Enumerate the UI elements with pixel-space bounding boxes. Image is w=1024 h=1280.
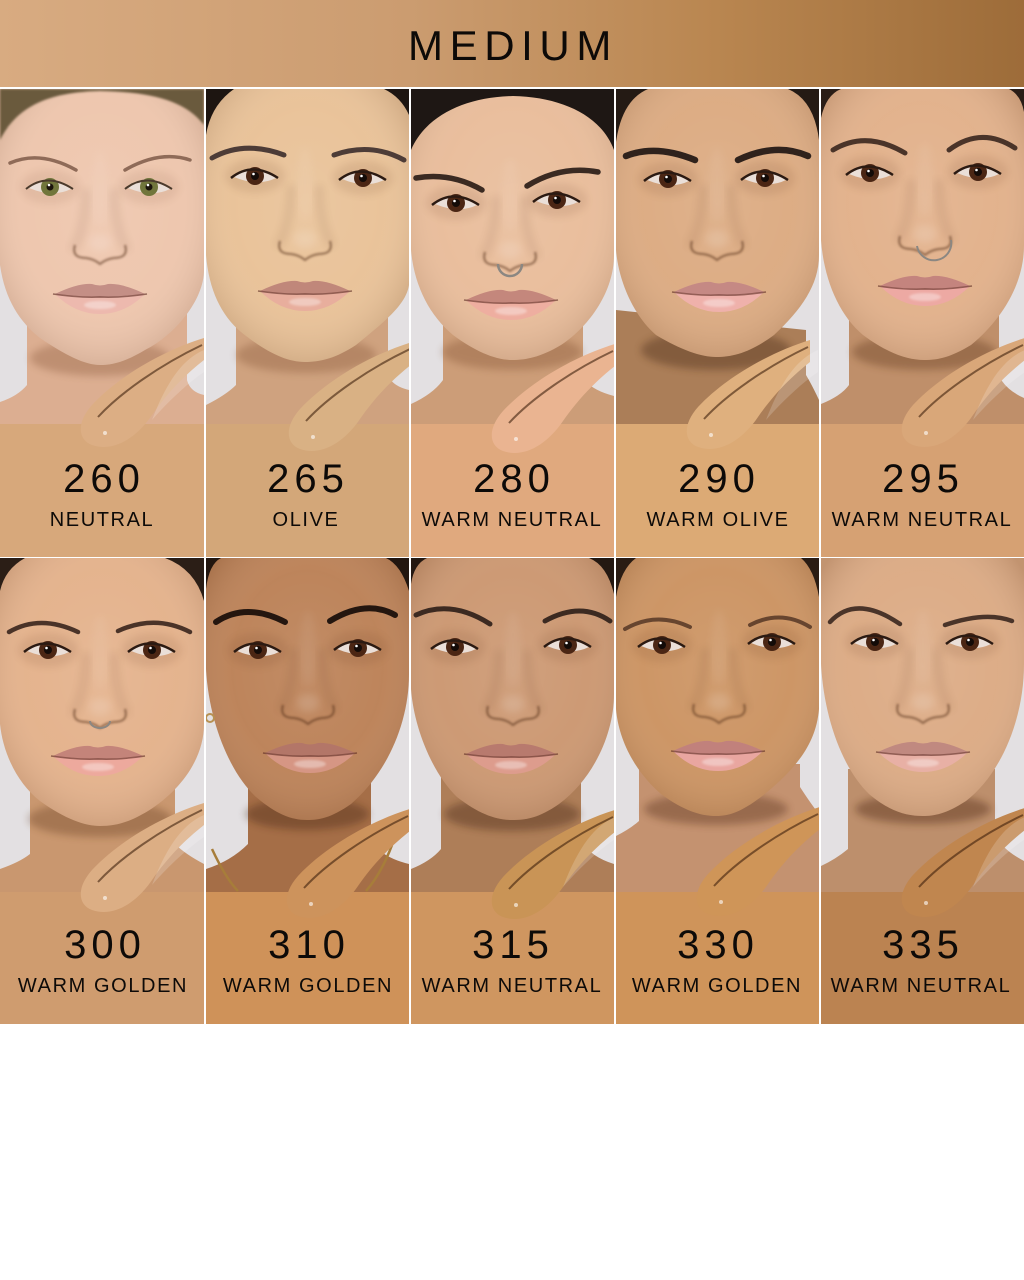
shade number 290: 290 <box>678 457 760 501</box>
portrait 315 <box>411 558 614 893</box>
shade name 310: WARM GOLDEN <box>223 975 393 997</box>
portrait 290 <box>616 89 819 424</box>
foundation smear 280 <box>492 344 615 453</box>
portrait 310 <box>206 558 409 893</box>
foundation smear 260 <box>81 338 204 447</box>
portrait 280 <box>411 89 614 424</box>
panel: shade 315 <box>411 558 614 1024</box>
panel: shade 260 <box>0 89 204 557</box>
foundation smear 300 <box>81 803 204 912</box>
shade name 265: OLIVE <box>273 509 339 531</box>
nose ring <box>90 721 110 728</box>
portrait 300 <box>0 558 204 893</box>
panel: shade 280 <box>411 89 614 557</box>
portrait 260 <box>0 89 204 424</box>
shade name 280: WARM NEUTRAL <box>422 509 602 531</box>
panel: shade 300 <box>0 558 204 1024</box>
foundation smear 310 <box>287 809 410 918</box>
portrait 295 <box>821 89 1024 424</box>
shade number 260: 260 <box>63 457 145 501</box>
portrait 330 <box>616 558 819 893</box>
shade number 310: 310 <box>268 923 350 967</box>
portrait 265 <box>206 89 409 424</box>
nose ring <box>498 264 522 276</box>
shade number 295: 295 <box>882 457 964 501</box>
panel: shade 295 <box>821 89 1024 557</box>
foundation smear 335 <box>902 808 1024 917</box>
panel: shade 330 <box>616 558 819 1024</box>
panel: shade 265 <box>206 89 409 557</box>
shade number 265: 265 <box>267 457 349 501</box>
shade name 260: NEUTRAL <box>50 509 154 531</box>
header banner <box>0 0 1024 87</box>
nose ring <box>917 240 951 260</box>
earring <box>206 714 214 722</box>
shade name 290: WARM OLIVE <box>646 509 790 531</box>
foundation smear 265 <box>289 342 412 451</box>
shade number 335: 335 <box>882 923 964 967</box>
necklace <box>212 845 392 891</box>
foundation smear 290 <box>687 340 818 449</box>
shade number 280: 280 <box>473 457 555 501</box>
shade name 295: WARM NEUTRAL <box>832 509 1012 531</box>
shade number 330: 330 <box>677 923 759 967</box>
panel: shade 290 <box>616 89 819 557</box>
panel: shade 335 <box>821 558 1024 1024</box>
shade name 315: WARM NEUTRAL <box>422 975 602 997</box>
shade number 315: 315 <box>472 923 554 967</box>
portrait 335 <box>821 558 1024 893</box>
shade name 330: WARM GOLDEN <box>632 975 802 997</box>
foundation smear 315 <box>492 810 615 919</box>
title: MEDIUM <box>408 22 618 69</box>
foundation smear 295 <box>902 338 1024 447</box>
panel: shade 310 <box>206 558 409 1024</box>
foundation smear 330 <box>697 807 820 916</box>
shade number 300: 300 <box>64 923 146 967</box>
shade name 335: WARM NEUTRAL <box>831 975 1011 997</box>
shade name 300: WARM GOLDEN <box>18 975 188 997</box>
